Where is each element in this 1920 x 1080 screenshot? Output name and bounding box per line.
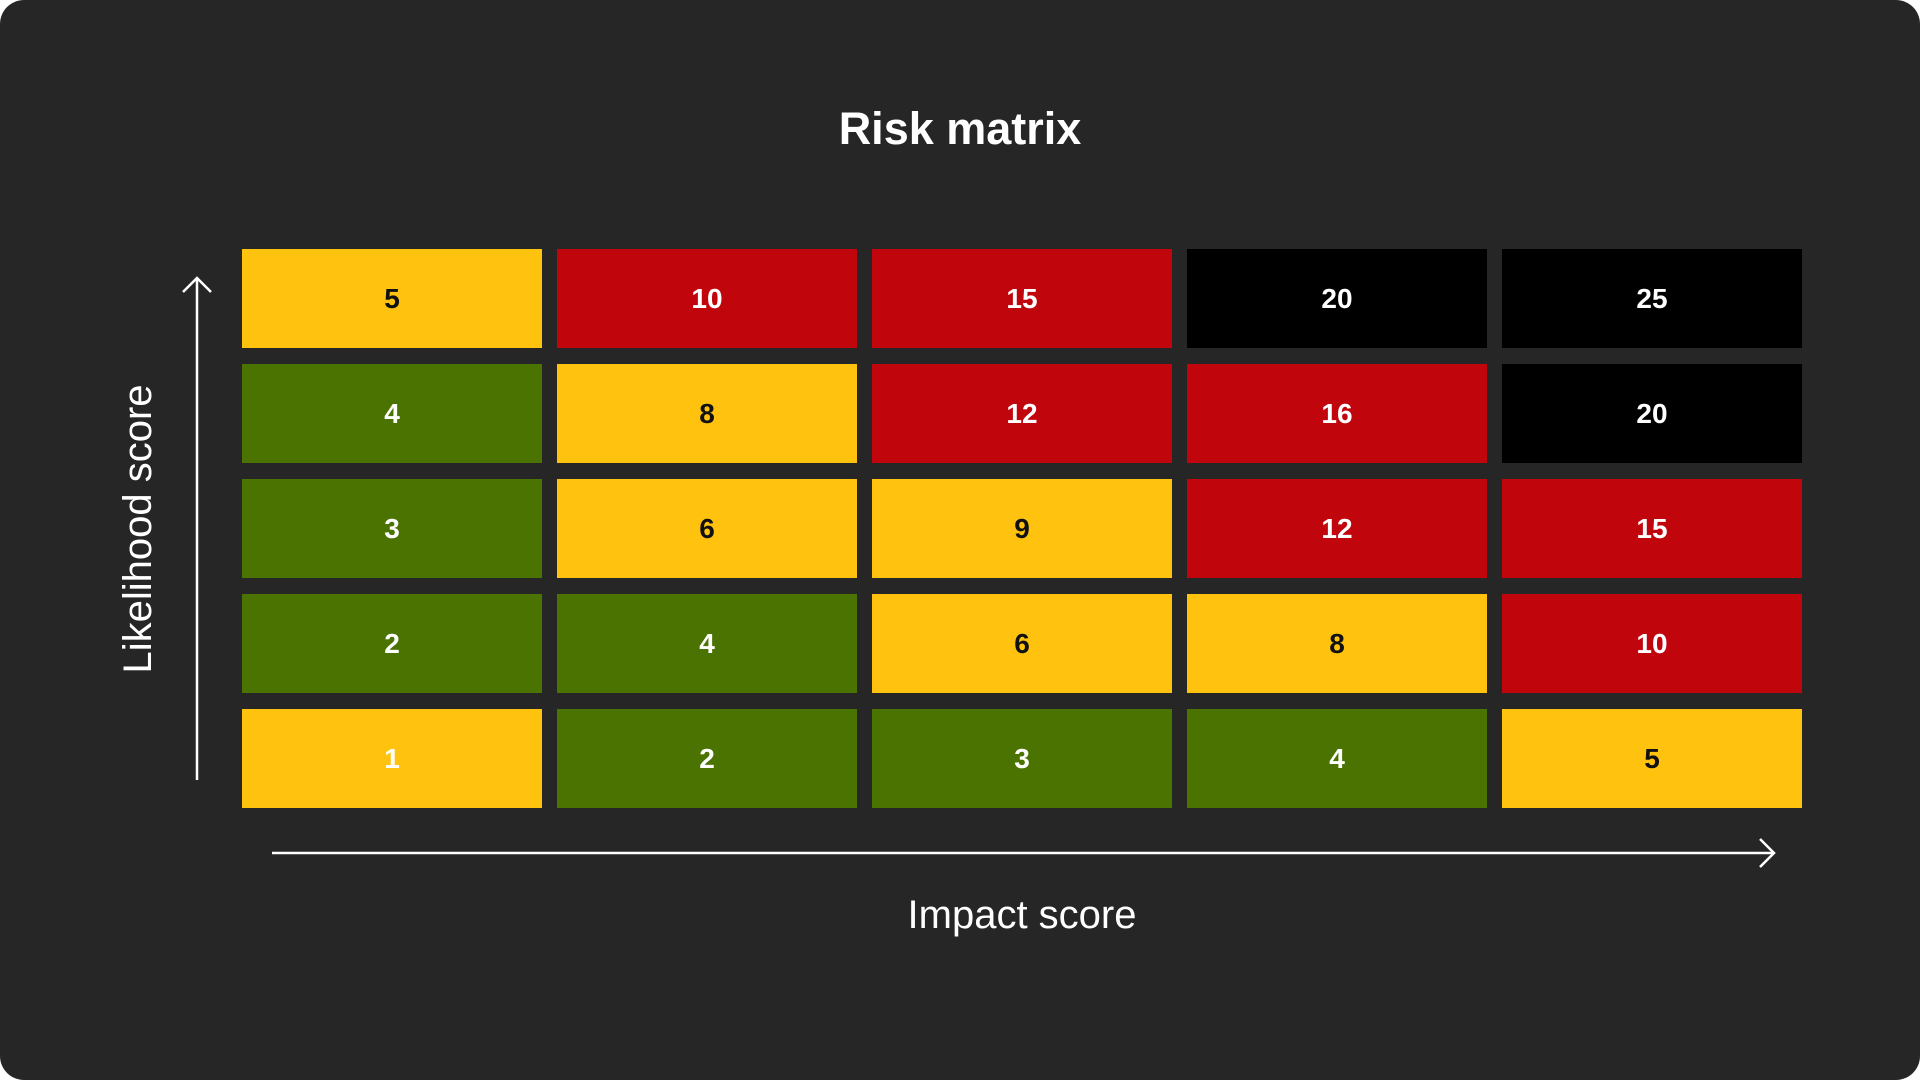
matrix grid: 3 <box>1014 742 1030 774</box>
matrix grid: 8 <box>699 398 715 428</box>
matrix grid: 15 <box>1006 282 1038 314</box>
matrix grid <box>242 249 1802 808</box>
matrix grid: 16 <box>1321 398 1353 428</box>
matrix grid: 12 <box>1006 398 1038 428</box>
matrix grid: 25 <box>1636 282 1668 314</box>
row 1: 1 <box>384 742 400 774</box>
matrix grid: 12 <box>1321 512 1353 544</box>
matrix grid: 2 <box>699 742 715 774</box>
row 4: 4 <box>384 398 400 428</box>
label: impact score: Impact score <box>908 893 1136 937</box>
matrix grid: 5 <box>1644 742 1660 774</box>
row 1 <box>242 709 542 808</box>
label: likelihood score: Likelihood score <box>116 384 160 674</box>
arrow: vertical likelihood axis <box>182 276 212 780</box>
matrix grid: 9 <box>1014 512 1030 544</box>
matrix grid: 20 <box>1321 282 1353 314</box>
title: Risk matrix <box>839 103 1081 154</box>
row 5 <box>242 249 542 348</box>
matrix grid: 6 <box>699 512 715 544</box>
row 5: 5 <box>384 282 400 314</box>
matrix grid: 15 <box>1636 512 1668 544</box>
row 4 <box>242 364 542 463</box>
matrix grid: 6 <box>1014 628 1030 658</box>
matrix grid: 4 <box>1329 742 1345 774</box>
matrix grid: 10 <box>691 282 723 314</box>
arrow: horizontal impact axis <box>272 838 1776 868</box>
row 2: 2 <box>384 628 400 658</box>
matrix grid: 10 <box>1636 628 1668 658</box>
matrix grid: 4 <box>699 628 715 658</box>
row 3: 3 <box>384 512 400 544</box>
matrix grid: 20 <box>1636 398 1668 428</box>
matrix grid: 8 <box>1329 628 1345 658</box>
row 3 <box>242 479 542 578</box>
row 2 <box>242 594 542 693</box>
